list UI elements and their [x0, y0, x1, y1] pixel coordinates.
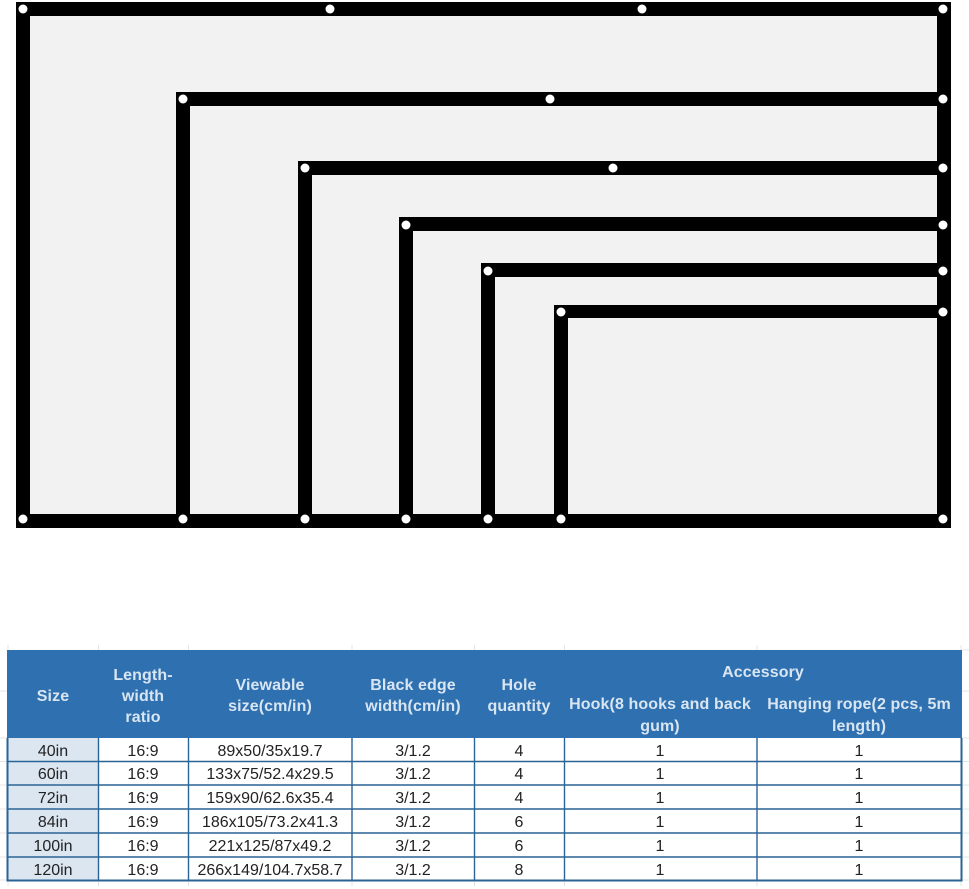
table header: gum)	[640, 718, 680, 735]
icon: eyelet holes	[18, 4, 948, 524]
table rows: 3/1.2	[395, 766, 431, 783]
table header: Length-	[113, 667, 173, 684]
table rows: 16:9	[127, 790, 159, 807]
table rows: 221x125/87x49.2	[209, 838, 331, 855]
table rows: 1	[656, 838, 665, 855]
table rows: 3/1.2	[395, 862, 431, 879]
table header: ratio	[125, 709, 161, 726]
table rows: 120in	[33, 862, 73, 879]
table rows: 1	[656, 790, 665, 807]
panel: nested projector screen sizes	[16, 2, 951, 528]
table header: length)	[832, 718, 886, 735]
table header: Black edge	[370, 677, 456, 694]
size column shading	[8, 738, 98, 880]
table rows: 4	[515, 766, 524, 783]
table rows: 1	[855, 862, 864, 879]
table rows	[33, 743, 864, 879]
table rows: 186x105/73.2x41.3	[202, 814, 338, 831]
table rows: 16:9	[127, 838, 159, 855]
table rows: 1	[656, 862, 665, 879]
table header: size(cm/in)	[228, 698, 312, 715]
table rows: 3/1.2	[395, 743, 431, 760]
table header: Size	[37, 688, 69, 705]
table header	[7, 650, 962, 738]
table rows: 3/1.2	[395, 814, 431, 831]
table header: Hole	[501, 677, 537, 694]
table header: quantity	[487, 698, 551, 715]
table: screen specifications	[0, 645, 969, 886]
table rows: 60in	[38, 766, 68, 783]
table rows: 1	[656, 814, 665, 831]
table rows: 8	[515, 862, 524, 879]
table rows: 3/1.2	[395, 790, 431, 807]
table rows: 100in	[33, 838, 73, 855]
table rows: 1	[855, 743, 864, 760]
table grid	[8, 738, 962, 880]
table rows: 1	[855, 814, 864, 831]
table header: Accessory	[722, 664, 804, 681]
table rows: 6	[515, 814, 524, 831]
table rows: 84in	[38, 814, 68, 831]
table rows: 1	[855, 766, 864, 783]
table rows: 72in	[38, 790, 68, 807]
table rows: 266x149/104.7x58.7	[197, 862, 343, 879]
table header: width	[121, 688, 164, 705]
table rows: 40in	[38, 743, 68, 760]
table rows: 1	[656, 743, 665, 760]
table rows: 6	[515, 838, 524, 855]
table rows: 16:9	[127, 862, 159, 879]
table rows: 4	[515, 790, 524, 807]
table rows: 1	[656, 766, 665, 783]
table rows: 3/1.2	[395, 838, 431, 855]
table rows: 159x90/62.6x35.4	[206, 790, 334, 807]
table rows: 16:9	[127, 766, 159, 783]
table rows: 1	[855, 790, 864, 807]
table header: Hanging rope(2 pcs, 5m	[767, 696, 951, 713]
table header: width(cm/in)	[364, 698, 461, 715]
table header: Viewable	[236, 677, 304, 694]
table rows: 4	[515, 743, 524, 760]
table rows: 133x75/52.4x29.5	[206, 766, 334, 783]
table rows: 16:9	[127, 743, 159, 760]
table rows: 1	[855, 838, 864, 855]
table rows: 89x50/35x19.7	[218, 743, 323, 760]
table header: Hook(8 hooks and back	[569, 696, 751, 713]
table rows: 16:9	[127, 814, 159, 831]
